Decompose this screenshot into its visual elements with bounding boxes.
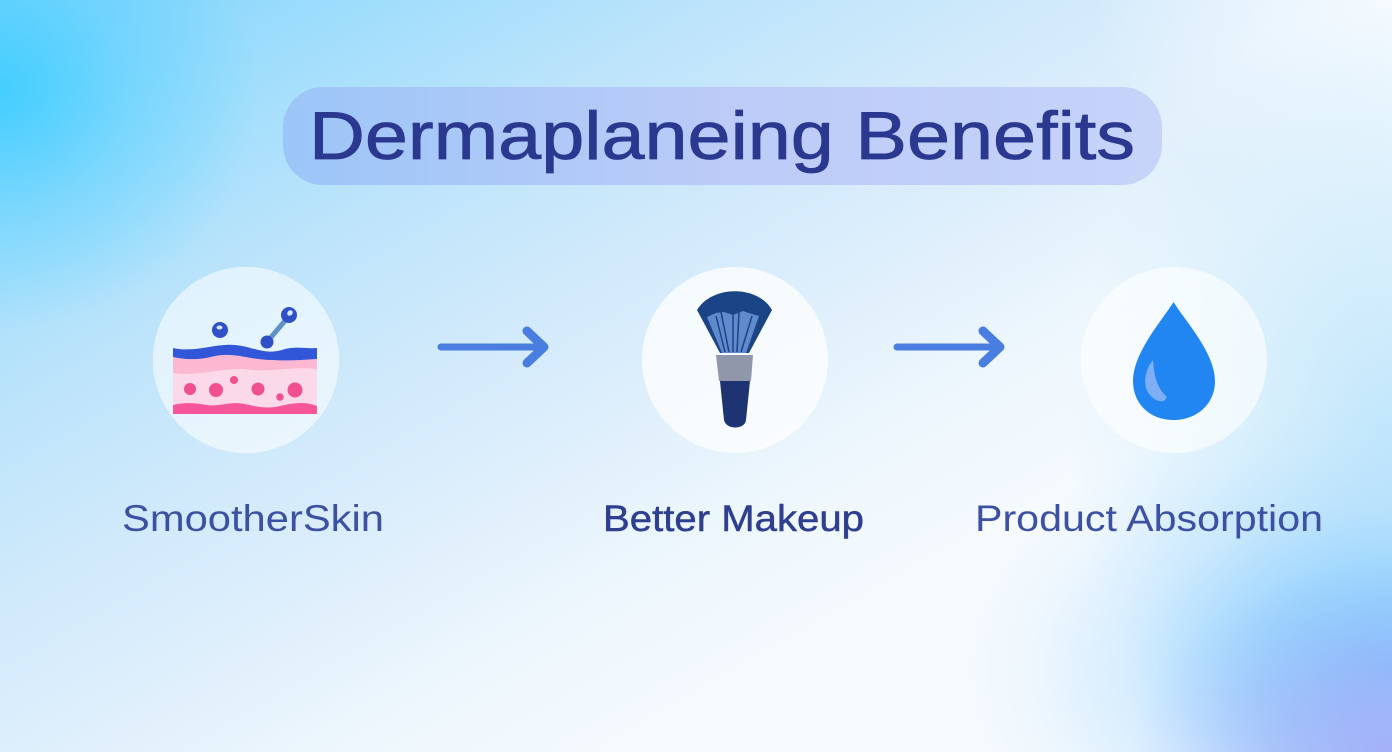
- benefit: better makeup: [603, 267, 864, 539]
- icon: skin layers: [173, 307, 317, 414]
- arrow 2: [897, 331, 1000, 363]
- icon circle: brush: [642, 267, 828, 453]
- benefit: product absorption: [975, 267, 1323, 539]
- icon circle: skin: [153, 267, 339, 453]
- title: [283, 87, 1162, 185]
- icon circle: drop: [1081, 267, 1267, 453]
- arrow 1: [441, 331, 544, 363]
- benefit: smoother skin: [122, 267, 384, 539]
- title text: Dermaplaneing Benefits: [309, 98, 1135, 174]
- label: product absorption: Product Absorption: [975, 498, 1323, 539]
- icon: makeup brush: [697, 291, 772, 428]
- label: better makeup: Better Makeup: [603, 498, 864, 539]
- icon: water drop: [1133, 302, 1215, 420]
- label: smoother skin: SmootherSkin: [122, 498, 384, 539]
- title pill background: [283, 87, 1162, 185]
